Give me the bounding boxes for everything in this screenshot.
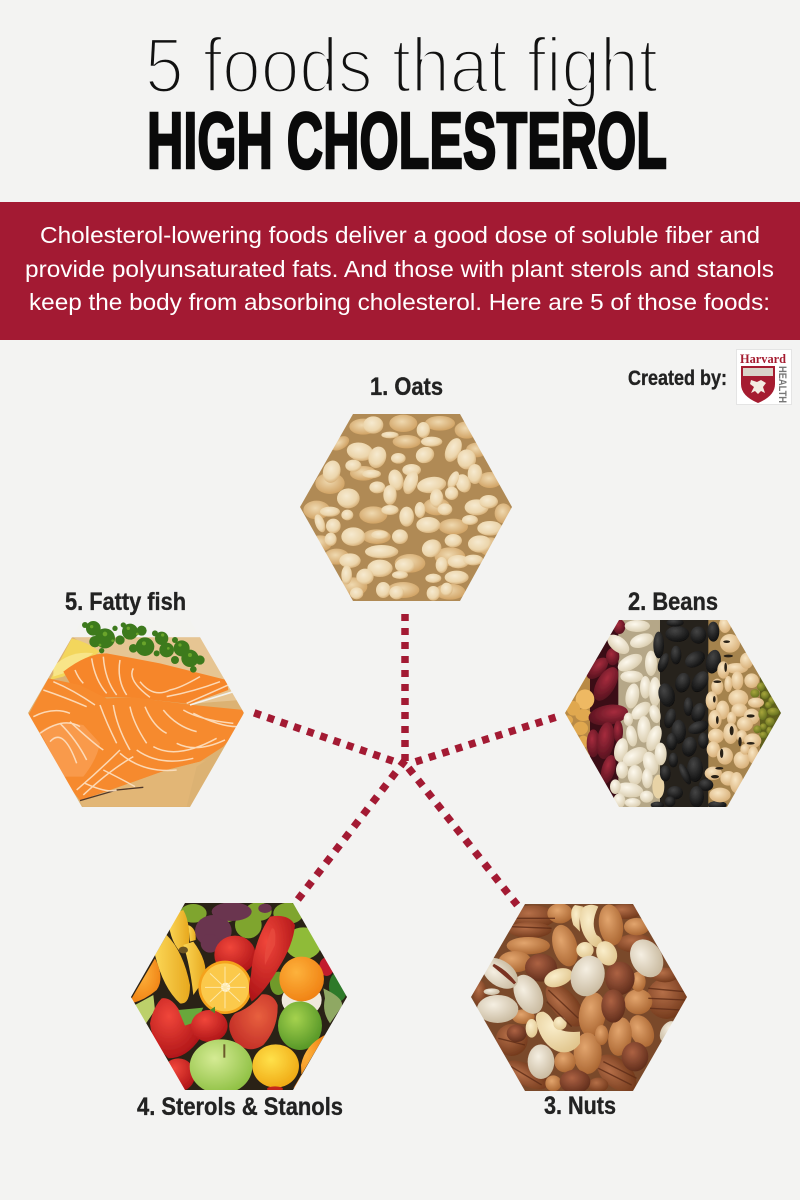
panel: sterols and stanols bbox=[125, 902, 355, 1121]
panel: oats bbox=[300, 377, 512, 601]
label: beans: 2. Beans bbox=[628, 588, 718, 616]
label: oats: 1. Oats bbox=[370, 373, 443, 401]
intro text bbox=[25, 222, 774, 315]
logo: Harvard Health: Harvard bbox=[740, 352, 786, 366]
intro text: keep the body from absorbing cholesterol. Here are 5 of those foods: bbox=[29, 289, 770, 315]
panel: fatty fish bbox=[28, 592, 244, 807]
photo: nuts hexagon bbox=[471, 904, 687, 1091]
logo: Harvard Health bbox=[736, 350, 792, 404]
connector lines bbox=[254, 614, 556, 905]
photo: salmon hexagon bbox=[28, 621, 244, 807]
credit text: Created by: bbox=[628, 367, 727, 390]
panel: nuts bbox=[465, 902, 695, 1120]
parsley bbox=[82, 621, 205, 673]
title bbox=[145, 21, 667, 185]
intro text: provide polyunsaturated fats. And those with plant sterols and stanols bbox=[25, 256, 774, 282]
photo: beans hexagon bbox=[560, 617, 790, 810]
credit bbox=[628, 350, 792, 404]
photo: oats hexagon bbox=[300, 414, 512, 601]
intro banner bbox=[0, 202, 800, 340]
title line 1: 5 foods that fight bbox=[145, 21, 658, 109]
logo: Harvard Health: HEALTH bbox=[776, 366, 788, 403]
label: fatty fish: 5. Fatty fish bbox=[65, 588, 186, 616]
label: sterols and stanols: 4. Sterols & Stanols bbox=[137, 1093, 343, 1121]
panel: beans bbox=[560, 588, 790, 810]
label: nuts: 3. Nuts bbox=[544, 1092, 616, 1120]
intro text: Cholesterol-lowering foods deliver a good dose of soluble fiber and bbox=[40, 222, 760, 248]
photo: fruits and vegetables hexagon bbox=[125, 902, 355, 1094]
